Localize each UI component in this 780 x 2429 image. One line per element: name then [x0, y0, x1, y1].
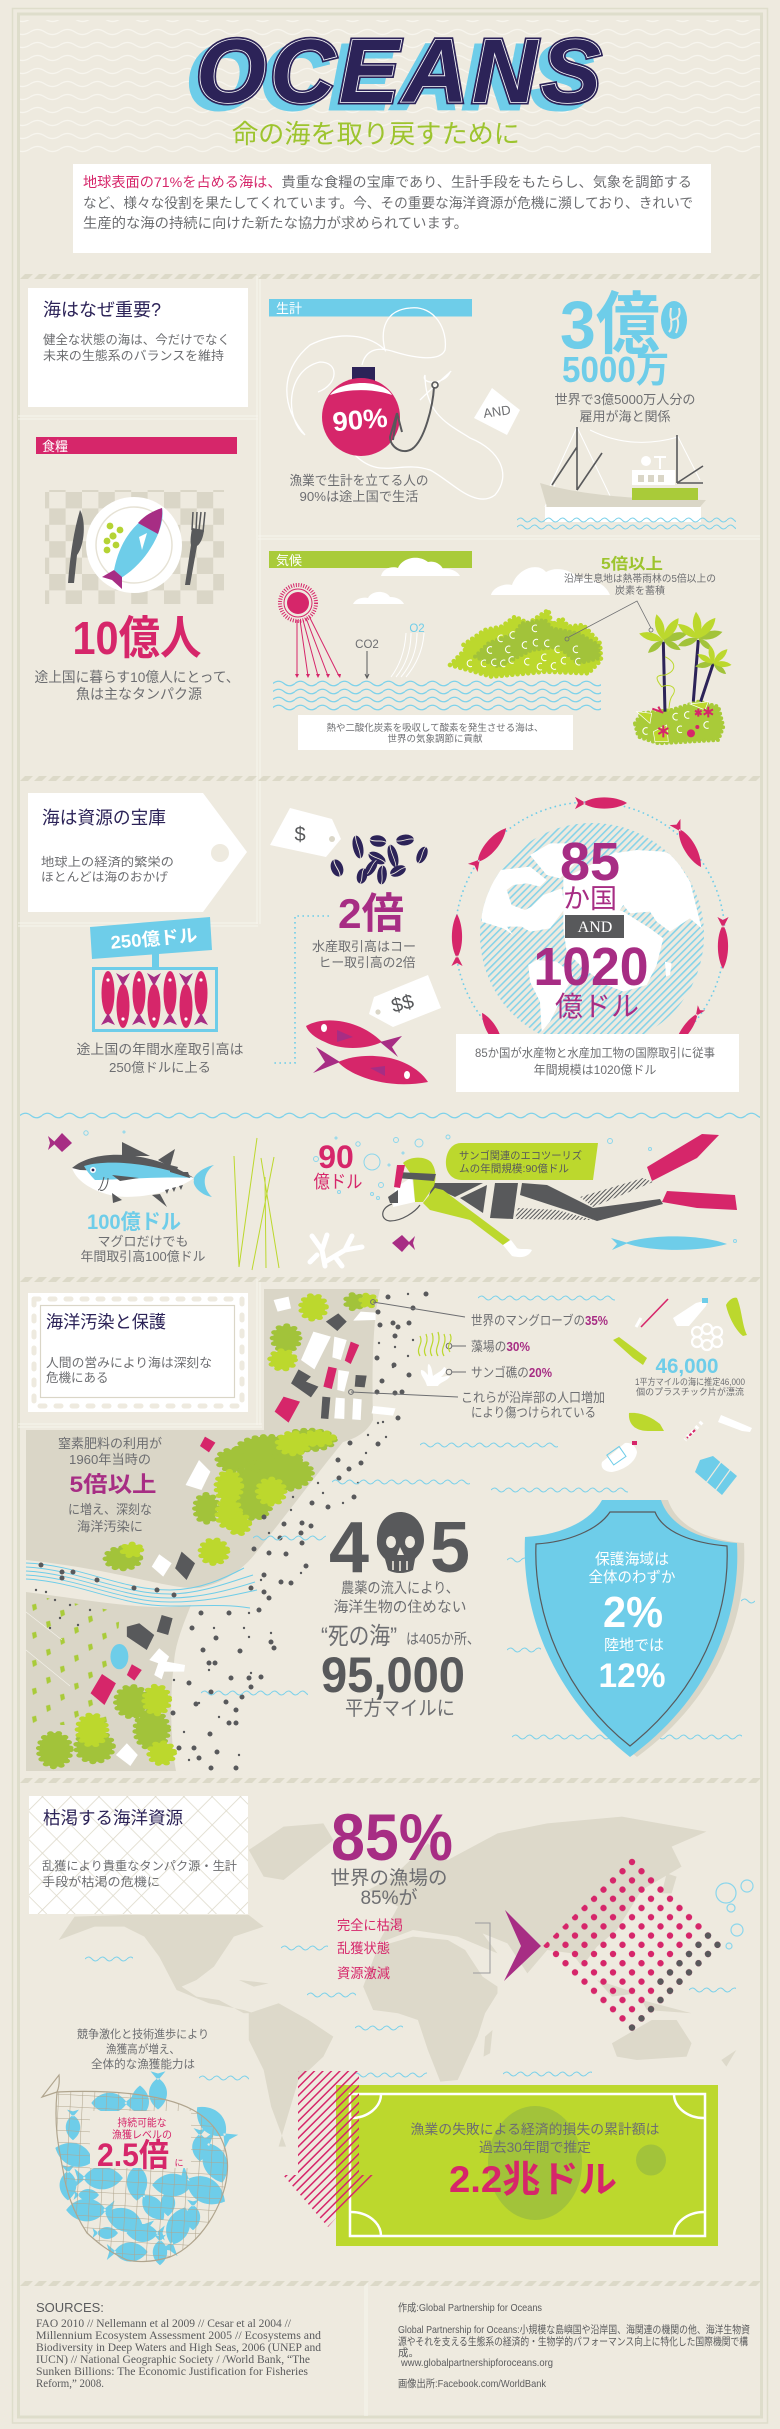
nitrogen text	[58, 1436, 162, 1534]
mangrove statistics: により傷つけられている	[471, 1405, 596, 1420]
sources: Biodiversity in Deep Waters and High Seas, 2006 (UNEP and	[36, 2340, 321, 2354]
shield: protected areas	[525, 1500, 744, 1757]
panel: depletion heading: 乱獲により貴重なタンパク源・生計	[42, 1858, 237, 1873]
panel: why important: 健全な状態の海は、今だけでなく	[43, 332, 230, 347]
icon: double dollar tag: $$	[389, 991, 416, 1018]
stat: 405 with skull	[329, 1508, 470, 1588]
plastic debris stat: 個のプラスチック片が漂流	[636, 1386, 744, 1397]
dot diamond chart	[543, 1857, 727, 2037]
stat: 2 times: ヒー取引高の2倍	[318, 955, 416, 970]
credits: 画像出所:Facebook.com/WorldBank	[398, 2377, 547, 2390]
field	[26, 1594, 120, 1725]
livelihoods heading bar	[269, 299, 472, 316]
AND diamond	[474, 388, 520, 435]
fishing capacity text	[77, 2027, 209, 2071]
employment caption: 世界で3億5000万人分の	[554, 392, 696, 407]
globe caption box: 85か国が水産物と水産加工物の国際取引に従事	[475, 1045, 715, 1060]
dead zones text: 95,000	[321, 1647, 465, 1703]
climate heading bar	[269, 551, 472, 568]
panel: livelihoods	[269, 287, 736, 530]
banknote: economic loss: 2.2兆ドル	[449, 2159, 617, 2200]
banknote: economic loss: 漁業の失敗による経済的損失の累計額は	[410, 2122, 660, 2137]
fishing capacity text: 競争激化と技術進歩により	[77, 2027, 209, 2041]
sources: IUCN) // National Geographic Society / /World Bank, “The	[36, 2352, 310, 2366]
icon: palm trees	[635, 611, 732, 743]
icon: small coral	[421, 1364, 450, 1386]
sources: Reform,” 2008.	[36, 2376, 104, 2390]
credits	[398, 2302, 750, 2390]
net callout text: 漁獲レベルの	[112, 2128, 172, 2141]
panel: depletion heading: 手段が枯渇の危機に	[42, 1874, 160, 1889]
icon: coral	[310, 1235, 362, 1266]
nitrogen text: に増え、深刻な	[68, 1502, 152, 1517]
icon: small purple fish	[392, 1235, 415, 1252]
livelihoods heading bar: 生計	[276, 301, 302, 316]
leader lines	[349, 1300, 466, 1397]
dead zones text: 平方マイルに	[345, 1697, 455, 1720]
shield: protected areas: 保護海域は	[595, 1551, 669, 1568]
icon: buoy 90%	[322, 367, 400, 456]
sources	[36, 2300, 321, 2390]
O2 label and arrows	[391, 623, 425, 677]
CO2 label and arrow: CO2	[355, 639, 379, 651]
stat: 405 with skull: 4	[329, 1508, 369, 1588]
bubbles	[84, 1131, 737, 1242]
dead zones text: は405か所、	[406, 1631, 480, 1648]
icons: plastic debris	[602, 1298, 752, 1495]
icon: dollar tag	[270, 808, 341, 857]
globe caption box: 年間規模は1020億ドル	[534, 1062, 656, 1077]
icon: mangrove bush	[450, 610, 601, 677]
nitrogen text: 5倍以上	[70, 1472, 156, 1497]
world map	[59, 1817, 736, 2147]
panel: depletion heading	[29, 1796, 248, 1914]
shield: protected areas: 陸地では	[604, 1637, 664, 1654]
O2 label and arrows: O2	[409, 623, 425, 635]
small waves	[201, 1295, 755, 1740]
livelihoods caption	[290, 473, 428, 504]
big number: 350 million: 3億	[560, 287, 660, 363]
icon: buoy 90%: 90%	[331, 403, 389, 437]
stat: 9 billion dollars reef: 90	[318, 1139, 354, 1175]
food description	[34, 669, 240, 702]
small waves	[85, 1945, 736, 2081]
stat: 10 billion dollars tuna: 年間取引高100億ドル	[80, 1249, 206, 1264]
stat: 2 times	[312, 890, 416, 970]
panel: climate	[269, 551, 732, 750]
employment caption: 雇用が海と関係	[579, 409, 671, 424]
depletion categories: 乱獲状態	[337, 1941, 390, 1956]
icon: seagrass	[234, 1138, 279, 1270]
nitrogen text: 1960年当時の	[69, 1452, 151, 1467]
panel: why important	[28, 288, 248, 407]
mangrove statistics: サンゴ礁の20%	[471, 1365, 552, 1380]
panel: food	[34, 437, 240, 702]
food description: 途上国に暮らす10億人にとって、	[34, 669, 240, 685]
icon: sun with rays	[280, 585, 341, 678]
icon: double dollar tag	[369, 975, 441, 1027]
sources: FAO 2010 // Nellemann et al 2009 // Cesar et al 2004 //	[36, 2316, 292, 2330]
stat: 2 times: 水産取引高はコー	[312, 939, 416, 954]
callout: coral tourism: サンゴ関連のエコツーリズ	[459, 1149, 582, 1162]
sign: 25 billion dollars	[76, 917, 244, 1075]
globe caption box	[456, 1034, 739, 1092]
panel: pollution heading: 危機にある	[46, 1371, 109, 1385]
panel: pollution heading	[28, 1293, 248, 1412]
CO2 label and arrow	[355, 639, 379, 678]
sources: Sunken Billions: The Economic Justification for Fisheries	[36, 2364, 308, 2378]
shield: protected areas: 2%	[603, 1588, 663, 1637]
icon: coffee beans	[328, 834, 430, 885]
sea waves	[273, 680, 601, 711]
title: OCEANS	[196, 22, 601, 122]
icon: scuba diver	[383, 1134, 737, 1257]
plastic debris stat	[635, 1355, 745, 1397]
panel: pollution heading: 人間の営みにより海は深刻な	[46, 1356, 212, 1370]
wave divider	[20, 1112, 760, 1119]
fishing line	[287, 308, 503, 499]
AND label	[565, 915, 624, 938]
title: OCEANS	[196, 22, 601, 122]
buildings	[91, 1297, 396, 1766]
mangrove statistics	[349, 1300, 608, 1420]
sources: SOURCES:	[36, 2300, 104, 2315]
stat: 9 billion dollars reef	[314, 1139, 362, 1192]
intro text box: 生産的な海の持続に向けた新たな協力が求められています。	[83, 215, 468, 231]
callout: coral tourism	[446, 1143, 598, 1180]
callout: coral tourism: ムの年間規模:90億ドル	[459, 1162, 569, 1175]
sign: 25 billion dollars: 250億ドルに上る	[109, 1060, 211, 1075]
carbon multiplier note: 沿岸生息地は熱帯雨林の5倍以上の	[564, 572, 716, 585]
stat: 85 countries: か国	[563, 884, 617, 914]
icon: fishing net full of fish	[42, 2071, 240, 2265]
big number: 350 million	[560, 287, 687, 390]
panel: treasure tag	[28, 793, 247, 912]
icon: fishing boat	[540, 427, 706, 522]
stat: 85 percent: 世界の漁場の	[330, 1867, 448, 1889]
employment caption	[554, 392, 696, 424]
big number: 350 million: 5000万	[562, 349, 669, 390]
stat: 85 percent	[330, 1800, 453, 1909]
banknote: economic loss	[283, 2071, 718, 2246]
icon: seaweed	[418, 1332, 451, 1356]
panel: depletion heading: 枯渇する海洋資源	[43, 1808, 183, 1828]
icon: plate with fish	[45, 490, 224, 604]
climate heading bar: 気候	[276, 553, 302, 568]
food description: 魚は主なタンパク源	[76, 686, 202, 702]
globe with fish ring	[452, 796, 728, 1034]
net callout text: 2.5倍	[97, 2137, 169, 2173]
shield: protected areas: 12%	[598, 1657, 666, 1695]
depletion categories	[337, 1918, 403, 1981]
stat: 102 billion dollars	[534, 937, 648, 1022]
dead zones text	[321, 1580, 480, 1720]
fishing capacity text: 漁獲高が増え、	[106, 2042, 180, 2056]
dead zones text: 農薬の流入により、	[341, 1580, 459, 1597]
icon: tuna	[72, 1142, 214, 1207]
panel: pollution heading: 海洋汚染と保護	[46, 1312, 166, 1332]
climate caption box: 世界の気象調節に貢献	[387, 733, 483, 745]
carbon multiplier note	[564, 555, 716, 597]
boat waves	[517, 517, 736, 530]
icon: fish hook	[390, 387, 434, 451]
stat: 102 billion dollars: 1020	[534, 937, 648, 997]
coastal map	[26, 1289, 426, 1771]
icon: skull	[377, 1512, 424, 1573]
panel: treasure tag: 地球上の経済的繁栄の	[41, 854, 174, 869]
fishing capacity text: 全体的な漁獲能力は	[91, 2057, 195, 2071]
credits: 作成:Global Partnership for Oceans	[398, 2302, 542, 2314]
credits: 成。	[398, 2347, 419, 2359]
bubbles	[716, 1880, 753, 1949]
net callout text: に	[174, 2158, 184, 2168]
river	[26, 1563, 257, 1608]
dead zones text: 海洋生物の住めない	[334, 1599, 466, 1616]
intro text box: など、様々な役割を果たしてくれています。今、その重要な海洋資源が危機に瀕しており、きれいで	[83, 195, 693, 211]
stat: 85 percent: 85%が	[360, 1887, 418, 1909]
panel: treasure tag: ほとんどは海のおかげ	[41, 870, 168, 884]
sign: 25 billion dollars: 250億ドル	[110, 925, 198, 953]
panel: why important: 海はなぜ重要?	[43, 300, 161, 320]
livelihoods caption: 漁業で生計を立てる人の	[290, 473, 428, 488]
mangrove statistics: 世界のマングローブの35%	[471, 1313, 608, 1328]
nitrogen text: 窒素肥料の利用が	[58, 1436, 162, 1451]
AND diamond: AND	[482, 402, 512, 421]
stat: 85 countries: 85	[560, 832, 620, 892]
sign: 25 billion dollars: 途上国の年間水産取引高は	[76, 1041, 244, 1057]
stat: 10 billion dollars tuna	[80, 1211, 206, 1264]
arrow: purple	[504, 1910, 541, 1981]
land masses	[26, 1289, 380, 1771]
intro text box	[73, 164, 711, 253]
intro text box: 地球表面の71%を占める海は、貴重な食糧の宝庫であり、生計手段をもたらし、気象を調節する	[83, 174, 692, 190]
title: OCEANS	[187, 28, 592, 128]
plastic debris stat: 1平方マイルの海に推定46,000	[635, 1376, 745, 1387]
AND label: AND	[578, 919, 612, 936]
hatched arrow	[283, 2071, 374, 2227]
livelihoods caption: 90%は途上国で生活	[300, 489, 418, 504]
climate caption box	[298, 715, 573, 750]
carbon multiplier note: 5倍以上	[601, 555, 663, 573]
title: OCEANS	[196, 22, 601, 122]
stat: 85 percent: 85%	[331, 1800, 453, 1874]
subtitle: 命の海を取り戻すために	[232, 119, 520, 149]
icon: two pink fish	[306, 1020, 428, 1084]
nitrogen text: 海洋汚染に	[77, 1519, 143, 1534]
carbon multiplier note: 炭素を蓄積	[615, 584, 665, 597]
stat: 102 billion dollars: 億ドル	[555, 991, 639, 1022]
panel: why important: 未来の生態系のバランスを維持	[43, 348, 224, 363]
net callout text	[97, 2116, 184, 2173]
runoff dots	[41, 1294, 426, 1768]
dead zones text: “死の海”	[321, 1623, 397, 1650]
icon: small purple fish	[48, 1133, 72, 1152]
net callout text: 持続可能な	[118, 2116, 166, 2129]
depletion categories: 資源激減	[337, 1965, 390, 1981]
leader lines	[565, 601, 653, 641]
stat: 405 with skull: 5	[430, 1508, 470, 1588]
mangrove statistics: これらが沿岸部の人口増加	[461, 1390, 605, 1405]
clouds	[353, 558, 610, 604]
icon: blue fish	[611, 1236, 727, 1250]
sources: Millennium Ecosystem Assessment 2005 // Ecosystems and	[36, 2328, 321, 2342]
shield: protected areas: 全体のわずか	[588, 1569, 676, 1586]
big number: 1 billion: 10億人	[72, 612, 202, 664]
climate caption box: 熱や二酸化炭素を吸収して酸素を発生させる海は、	[326, 722, 544, 734]
credits: www.globalpartnershipforoceans.org	[400, 2357, 553, 2369]
stat: 10 billion dollars tuna: マグロだけでも	[97, 1234, 189, 1249]
stat: 9 billion dollars reef: 億ドル	[314, 1172, 362, 1192]
mangrove statistics: 藻場の30%	[471, 1339, 530, 1354]
dotted connector	[271, 916, 329, 1063]
plastic debris stat: 46,000	[656, 1355, 718, 1378]
food heading bar: 食糧	[42, 439, 68, 454]
panel: treasure tag: 海は資源の宝庫	[42, 808, 166, 828]
bracket	[473, 1923, 490, 1973]
stat: 10 billion dollars tuna: 100億ドル	[87, 1211, 181, 1234]
banknote: economic loss: 過去30年間で推定	[479, 2140, 591, 2155]
green vegetation	[39, 1294, 375, 1767]
icon: dollar tag: $	[294, 824, 306, 846]
stat: 2 times: 2倍	[338, 890, 404, 937]
food heading bar	[36, 437, 237, 454]
depletion categories: 完全に枯渇	[337, 1918, 403, 1933]
